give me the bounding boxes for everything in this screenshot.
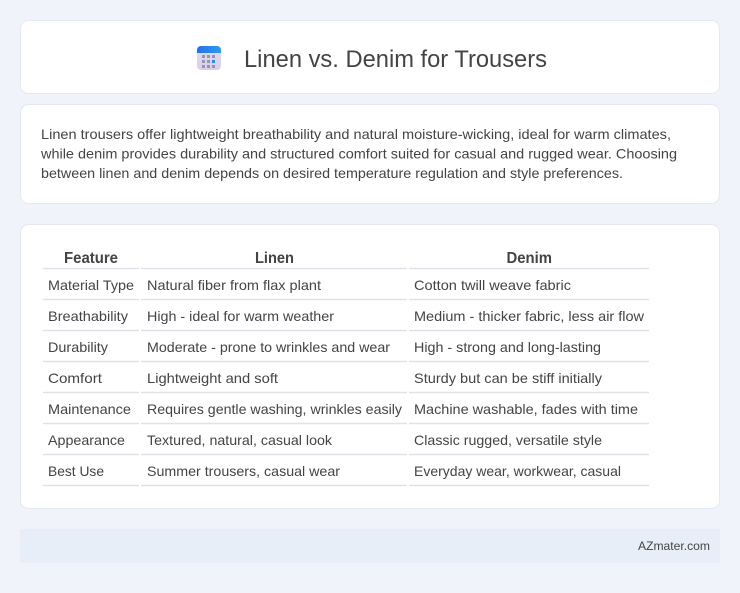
row: durability: High - strong and long-lasting (414, 339, 601, 355)
row: appearance: Textured, natural, casual look (147, 432, 333, 448)
row: durability (43, 339, 649, 362)
footer source text: AZmater.com (638, 539, 710, 553)
row: appearance (43, 432, 649, 454)
row: appearance: Appearance (48, 432, 125, 448)
row: comfort: Comfort (48, 370, 102, 386)
row: breathability (43, 308, 649, 330)
row: maintenance: Maintenance (48, 401, 131, 417)
description text: Linen trousers offer lightweight breathability and natural moisture-wicking, ideal for warm climates, (41, 126, 671, 142)
row: maintenance: Requires gentle washing, wrinkles easily (147, 401, 402, 417)
row: breathability: High - ideal for warm weather (147, 308, 334, 324)
header panel (20, 20, 720, 94)
row: breathability: Breathability (48, 308, 128, 324)
row: material type: Natural fiber from flax plant (147, 277, 321, 293)
row: material type: Cotton twill weave fabric (414, 277, 571, 293)
row: best use: Everyday wear, workwear, casual (414, 463, 621, 479)
table header row: Denim (506, 250, 552, 267)
row: best use (43, 463, 649, 486)
description text: between linen and denim depends on desired temperature regulation and style preferences. (41, 165, 623, 181)
row: material type (43, 277, 649, 300)
row: material type: Material Type (48, 277, 134, 293)
row: durability: Moderate - prone to wrinkles and wear (147, 339, 390, 355)
title: Linen vs. Denim for Trousers (244, 46, 547, 73)
row: best use: Best Use (48, 463, 104, 479)
table header row: Feature (64, 250, 118, 267)
icon: calendar (197, 46, 221, 70)
table header row: Linen (255, 250, 294, 267)
row: appearance: Classic rugged, versatile style (414, 432, 602, 448)
row: maintenance (43, 401, 649, 424)
row: breathability: Medium - thicker fabric, less air flow (414, 308, 645, 324)
panel: description (20, 104, 720, 204)
row: durability: Durability (48, 339, 108, 355)
row: comfort: Sturdy but can be stiff initially (414, 370, 602, 386)
description text: while denim provides durability and structured comfort suited for casual and rugged wear. Choosing (40, 146, 677, 162)
row: comfort: Lightweight and soft (147, 370, 278, 386)
table header row (43, 250, 649, 268)
description text (40, 126, 677, 181)
panel: comparison table (20, 224, 720, 508)
footer bar (20, 529, 720, 563)
row: comfort (43, 370, 649, 392)
row: best use: Summer trousers, casual wear (147, 463, 340, 479)
row: maintenance: Machine washable, fades with time (414, 401, 638, 417)
